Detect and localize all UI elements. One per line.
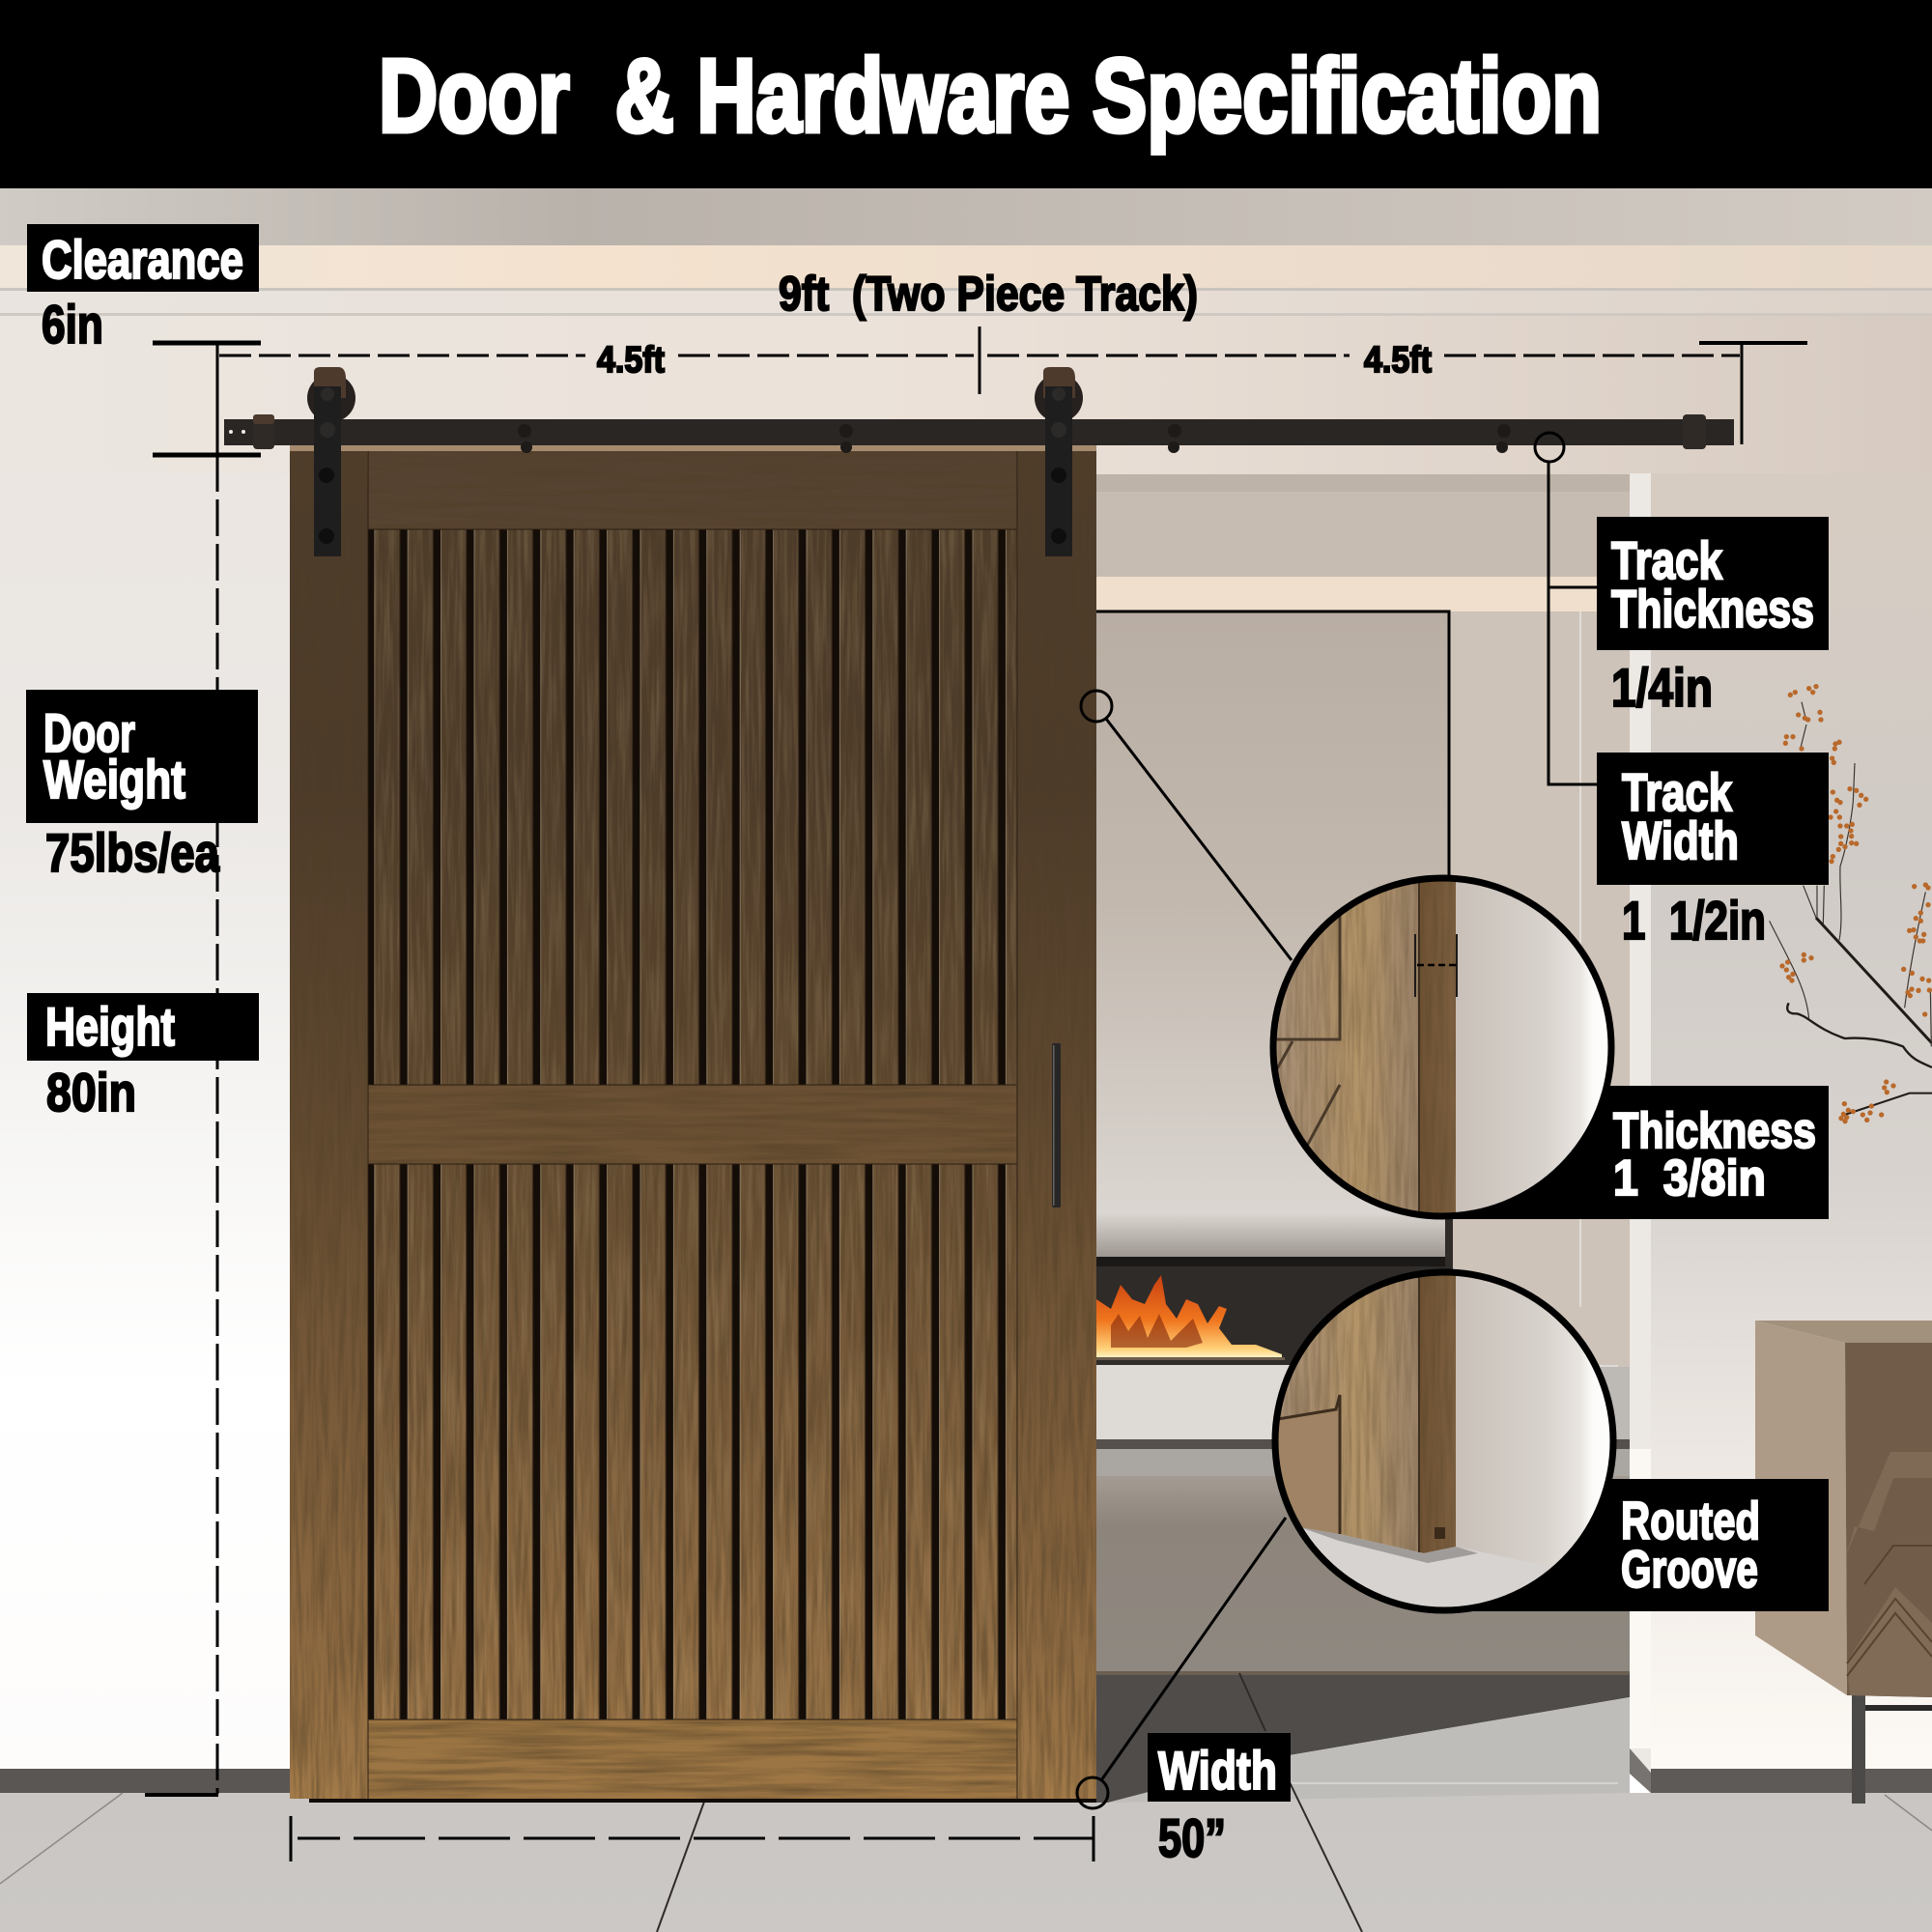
label: routed groove: Groove [1621,1539,1758,1599]
label: track thickness: 1/4in [1611,657,1713,718]
label: door weight: Weight [43,749,185,810]
label: height: 80in [46,1062,136,1122]
label: track thickness [1597,517,1829,718]
door pull handle [1052,1043,1061,1208]
title: Door & Hardware Specification [379,37,1602,154]
label: track width: Width [1622,810,1739,870]
slatted panels [368,529,1017,1719]
label backing: routed groove [1444,1479,1829,1611]
callout lines: door thickness [1081,611,1449,1271]
fireplace flame [1096,1275,1285,1360]
label: track width: 1 1/2in [1622,890,1766,951]
label: height [27,993,259,1122]
label backing: thickness [1442,1086,1829,1219]
label: width: Width [1158,1740,1277,1801]
track length dimension lines [219,327,1807,444]
detail circle: routed groove [1265,1265,1623,1623]
label: right track half: 4.5ft [1364,340,1432,381]
decorative branch with berries [1770,684,1932,1123]
barn door [290,445,1096,1803]
label: total track length: 9ft (Two Piece Track) [779,267,1198,321]
label: track width [1597,753,1829,951]
label: track thickness: Thickness [1611,579,1814,639]
clearance dimension lines [153,343,261,455]
label: thickness [1613,1103,1816,1207]
right hanger [1035,367,1083,556]
header bar [0,0,1932,188]
door rails [368,451,1017,1799]
door stiles [290,451,1096,1799]
label: door weight: 75lbs/ea [45,822,220,883]
detail circle: door thickness [1265,869,1620,1227]
label: track width: Track [1622,762,1732,822]
width dimension line [291,1816,1094,1861]
label: routed groove: Routed [1621,1491,1760,1550]
label: width [1148,1733,1291,1868]
label: clearance: 6in [42,294,103,355]
label: left track half: 4.5ft [597,340,665,381]
height dimension line [145,455,218,1795]
sideboard cabinet [1755,1321,1932,1804]
label: door weight [26,690,258,883]
label: height: Height [45,996,175,1057]
callout lines: routed groove [1077,1518,1286,1808]
sliding track [224,414,1734,453]
label: clearance [27,224,259,355]
label: width: 50” [1158,1807,1226,1868]
label: track thickness: Track [1611,530,1722,590]
callout lines: track [1535,433,1597,784]
label: clearance: Clearance [42,229,243,290]
label: door weight: Door [43,702,135,763]
left hanger [307,367,355,556]
label: routed groove [1621,1491,1760,1599]
label: thickness: Thickness [1613,1103,1816,1159]
label: thickness: 1 3/8in [1613,1151,1766,1207]
